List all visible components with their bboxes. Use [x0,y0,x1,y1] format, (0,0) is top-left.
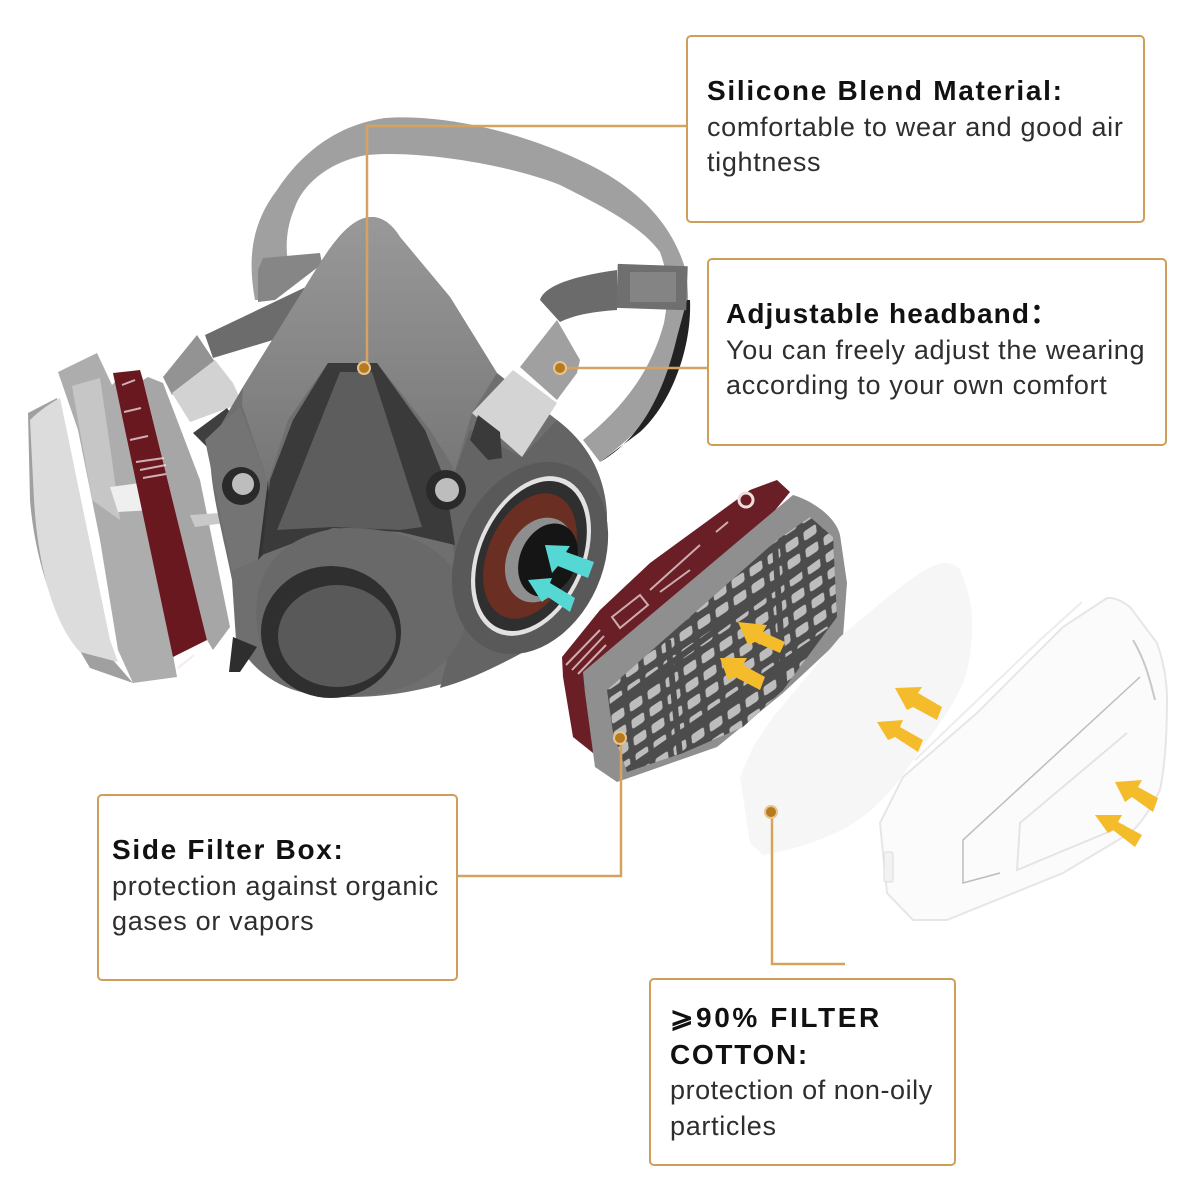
leader lines [367,126,845,964]
mask illustration [28,117,1168,966]
text: silicone blend material: Silicone Blend Material: [707,75,1064,106]
mask inhalation port [423,437,637,679]
callout: side filter box [97,794,458,981]
head strap [252,117,690,462]
text: side filter box: protection against organic [112,870,439,900]
text: side filter box [112,834,439,936]
left adjuster buckle [163,335,242,447]
text: silicone blend material [707,75,1124,177]
side filter box [562,480,860,790]
text: adjustable headband: You can freely adjust the wearing [726,334,1145,364]
text: filter cotton [670,1002,933,1140]
mask body [205,217,607,697]
text: side filter box: gases or vapors [112,906,314,936]
clear cover [880,598,1167,920]
text: filter cotton: COTTON: [670,1038,809,1070]
text: adjustable headband: Adjustable headband： [726,298,1059,329]
text: filter cotton: ⩾90% FILTER [670,1002,882,1033]
text: filter cotton: particles [670,1110,777,1140]
leader dots [358,362,777,818]
right webbing strap [540,264,688,322]
icon: yellow arrows on cotton [877,687,942,752]
text: silicone blend material: comfortable to wear and good air [707,112,1124,142]
text: filter cotton: protection of non-oily [670,1075,933,1105]
callout: adjustable headband [707,258,1167,446]
callout: filter cotton [649,978,956,1166]
filter cotton pad [740,563,972,855]
exhalation valve disc [261,566,401,698]
text: silicone blend material: tightness [707,147,821,177]
right adjuster buckle [470,320,580,460]
text: side filter box: Side Filter Box: [112,834,345,865]
icon: yellow arrows on cover [1095,780,1158,847]
text: adjustable headband [726,298,1145,400]
icon: teal arrows [528,545,594,612]
left cartridge [28,353,230,683]
left webbing strap [205,253,322,358]
callout: silicone blend material [686,35,1145,223]
icon: yellow arrows on filter box [720,622,785,690]
text: adjustable headband: according to your own comfort [726,370,1107,400]
